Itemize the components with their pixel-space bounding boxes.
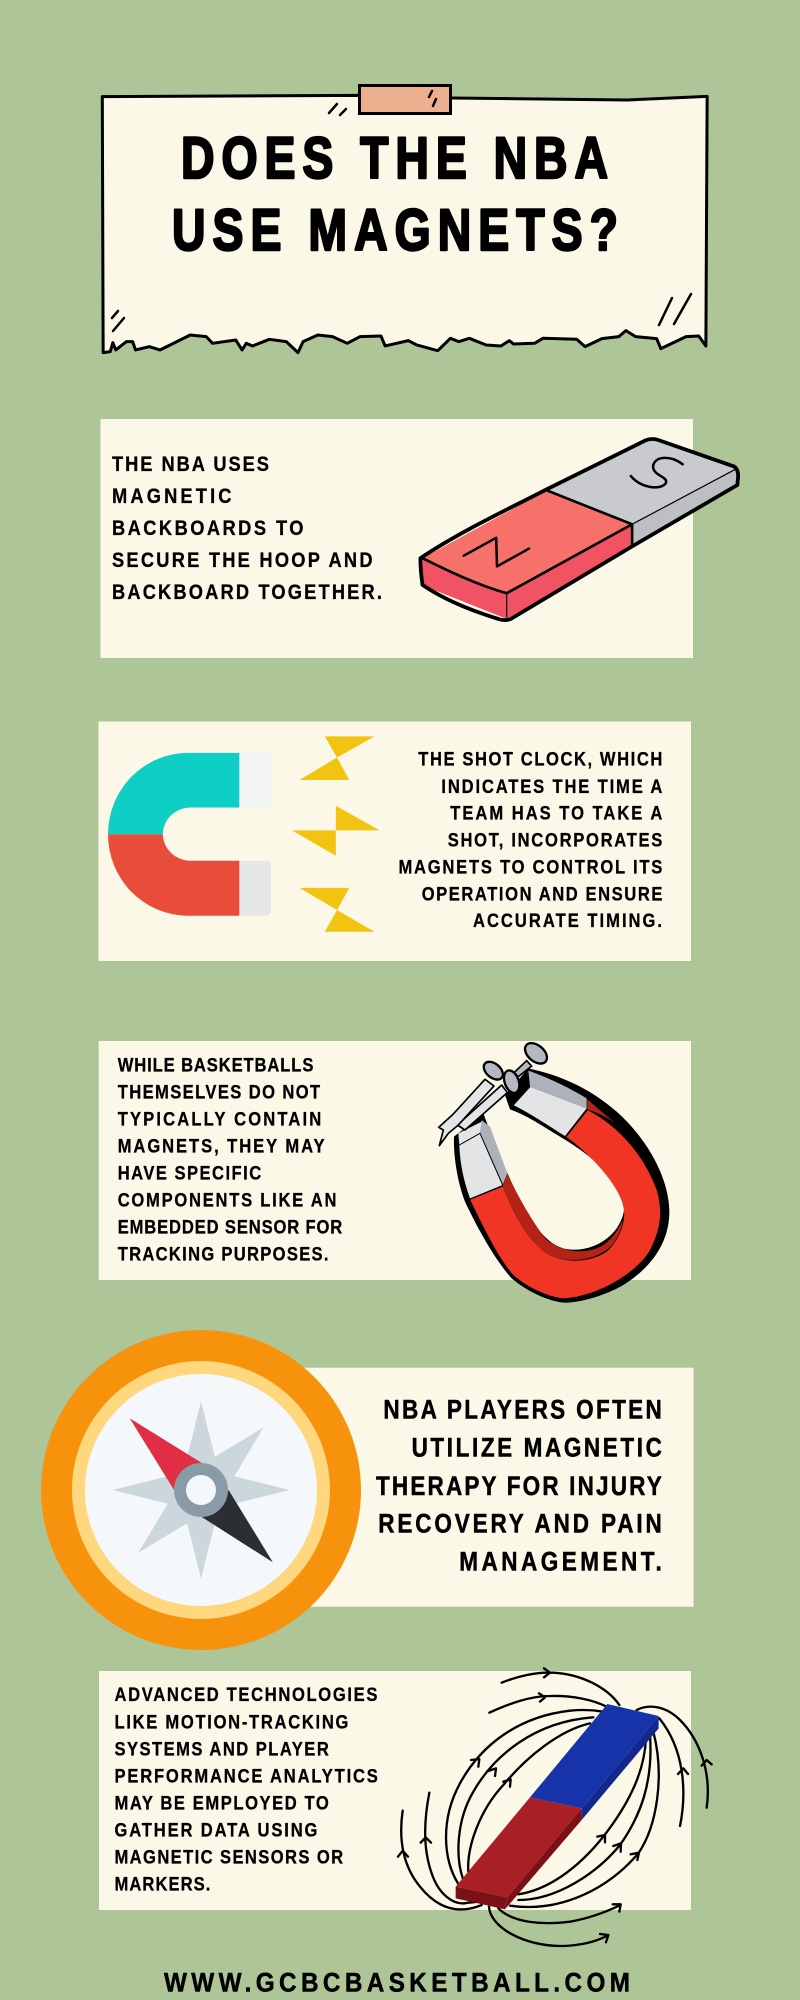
text block: HAVE SPECIFIC: [118, 1162, 261, 1184]
text block: MANAGEMENT.: [459, 1548, 662, 1577]
panel background: [99, 1041, 691, 1280]
panel background: [98, 722, 691, 961]
text block: ADVANCED TECHNOLOGIES: [114, 1684, 377, 1705]
text block: MAGNETS TO CONTROL ITS: [398, 856, 662, 878]
footer website URL: WWW.GCBCBASKETBALL.COM: [164, 1968, 630, 1998]
text block: THE NBA USES: [112, 453, 269, 476]
scratch marks: [112, 91, 691, 331]
text block: [114, 1684, 378, 1895]
text block: LIKE MOTION-TRACKING: [114, 1711, 348, 1733]
panel background: [100, 419, 693, 658]
text block: COMPONENTS LIKE AN: [118, 1189, 336, 1211]
text block: MARKERS.: [114, 1873, 210, 1895]
text block: RECOVERY AND PAIN: [378, 1510, 662, 1539]
text block: [376, 1396, 662, 1577]
icon: horseshoe magnet: [108, 753, 271, 916]
text block: MAGNETIC SENSORS OR: [114, 1846, 343, 1868]
text block: SHOT, INCORPORATES: [448, 829, 662, 851]
icon: red horseshoe magnet with nails: [439, 1039, 669, 1303]
text block: [118, 1054, 342, 1265]
text block: WHILE BASKETBALLS: [118, 1054, 313, 1076]
panel: basketball sensors: [99, 1039, 691, 1303]
text block: THEMSELVES DO NOT: [118, 1081, 320, 1103]
icon: bar magnet N S: [420, 439, 738, 620]
panel: motion tracking technology: [99, 1668, 712, 1946]
panel background: [200, 1368, 694, 1607]
text block: TEAM HAS TO TAKE A: [450, 802, 662, 824]
text block: THE SHOT CLOCK, WHICH: [418, 748, 662, 770]
title: DOES THE NBA: [181, 126, 608, 191]
title: [172, 126, 618, 263]
text block: NBA PLAYERS OFTEN: [383, 1396, 662, 1425]
panel: magnetic backboards: [100, 419, 738, 658]
text block: MAGNETS, THEY MAY: [118, 1135, 325, 1157]
text block: MAY BE EMPLOYED TO: [114, 1792, 329, 1814]
text block: BACKBOARDS TO: [112, 517, 304, 540]
text block: THERAPY FOR INJURY: [376, 1472, 662, 1501]
text block: INDICATES THE TIME A: [441, 776, 662, 797]
text block: EMBEDDED SENSOR FOR: [118, 1216, 342, 1238]
tape: [360, 86, 450, 114]
panel: torn paper title note: [102, 86, 707, 353]
text block: [112, 453, 382, 604]
text block: MAGNETIC: [112, 485, 232, 508]
title: USE MAGNETS?: [172, 198, 618, 263]
panel: shot clock: [98, 722, 691, 961]
text block: BACKBOARD TOGETHER.: [112, 581, 382, 604]
icon: compass: [41, 1330, 361, 1650]
text block: TRACKING PURPOSES.: [118, 1243, 329, 1265]
panel: magnetic therapy: [41, 1330, 694, 1650]
text block: ACCURATE TIMING.: [473, 910, 662, 931]
icon: bar magnet with field lines: [398, 1668, 712, 1946]
torn paper note: [102, 95, 707, 353]
text block: OPERATION AND ENSURE: [422, 883, 662, 905]
text block: TYPICALLY CONTAIN: [118, 1108, 321, 1130]
panel background: [99, 1671, 691, 1910]
text block: UTILIZE MAGNETIC: [412, 1434, 662, 1463]
text block: GATHER DATA USING: [114, 1819, 317, 1841]
text block: SYSTEMS AND PLAYER: [114, 1738, 329, 1760]
text block: [398, 748, 662, 931]
text block: PERFORMANCE ANALYTICS: [114, 1765, 378, 1787]
icon: lightning sparks: [292, 736, 380, 932]
text block: SECURE THE HOOP AND: [112, 549, 373, 572]
